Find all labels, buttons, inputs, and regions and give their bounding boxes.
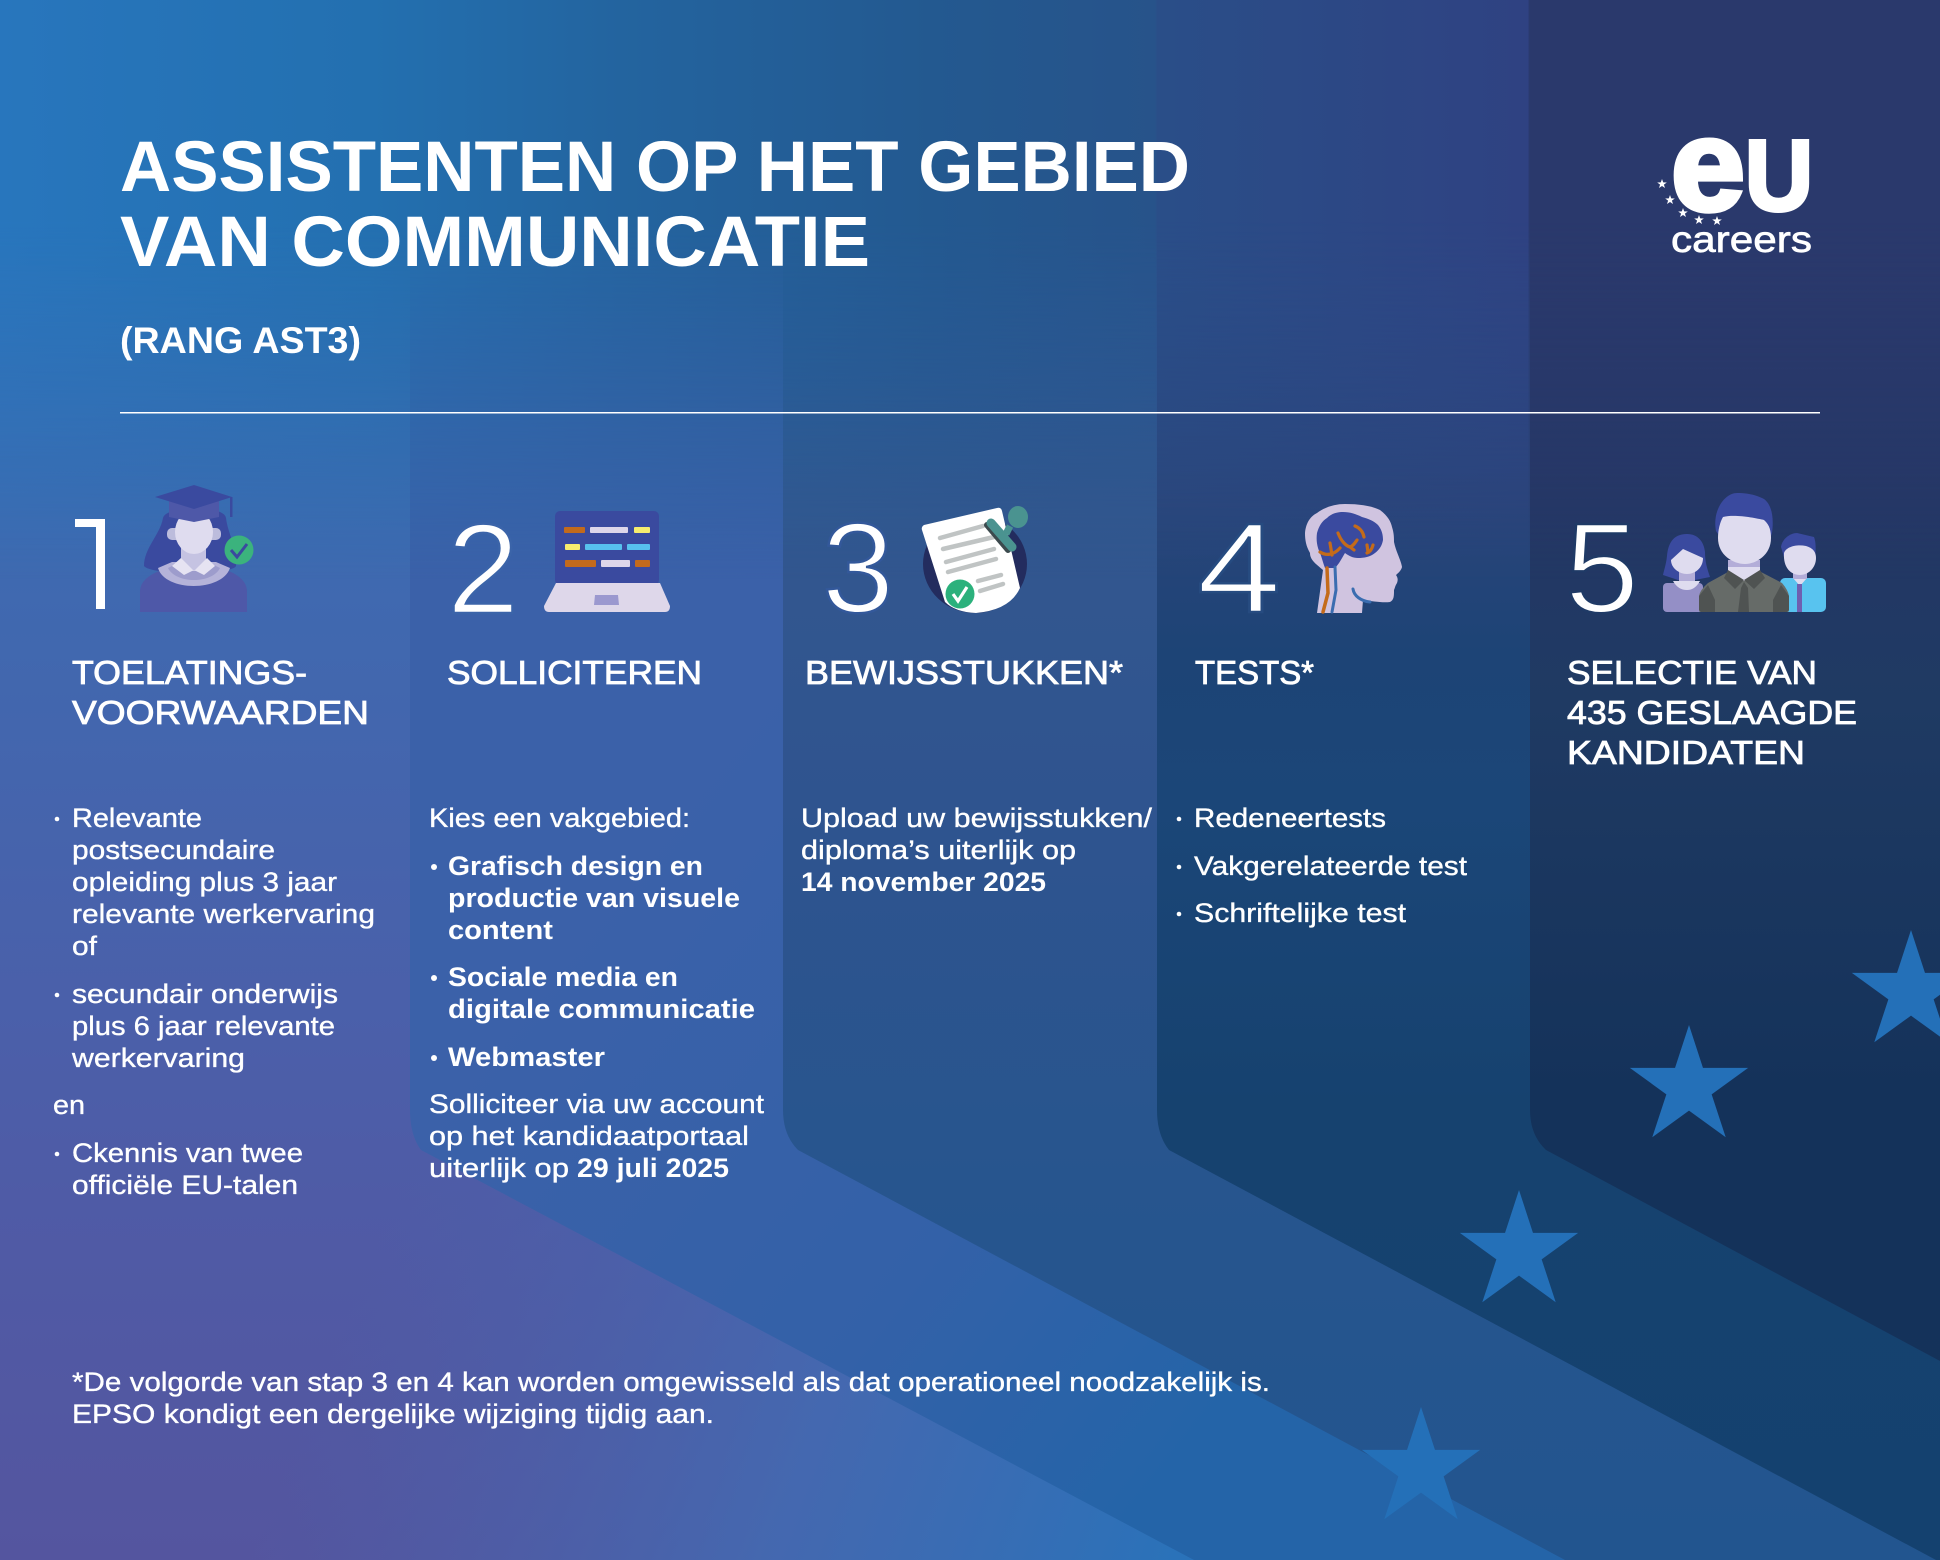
text: step 2 application: [429, 803, 765, 1183]
text: step 3 evidence: 14 november 2025: [801, 867, 1046, 897]
text: step 3 evidence: [801, 803, 1153, 897]
text: step 1 requirements: werkervaring: [71, 1043, 245, 1073]
heading: step 5: KANDIDATEN: [1567, 734, 1805, 771]
footnote: EPSO kondigt een dergelijke wijziging tijdig aan.: [72, 1399, 714, 1429]
number 5: 5: [1565, 497, 1639, 640]
text: step 2 application: op het kandidaatportaal: [429, 1121, 749, 1151]
icon: graduate: [140, 485, 254, 612]
stars decoration: [1362, 930, 1940, 1519]
heading: step 5: 435 GESLAAGDE: [1567, 694, 1857, 731]
heading: step 1: [72, 654, 369, 731]
text: step 1 requirements: secundair onderwijs: [72, 979, 338, 1009]
text: step 1 requirements: Relevante: [72, 803, 202, 833]
heading: step 2: SOLLICITEREN: [447, 654, 702, 691]
text: step 2 application: 29 juli 2025: [577, 1153, 729, 1183]
heading: step 3: BEWIJSSTUKKEN*: [805, 654, 1123, 691]
text: step 1 requirements: en: [53, 1090, 85, 1120]
heading: step 1: TOELATINGS-: [72, 654, 307, 691]
text: step 1 requirements: Ckennis van twee: [72, 1138, 303, 1168]
logo: eu careers: e: [1671, 92, 1745, 238]
text: step 1 requirements: of: [72, 931, 98, 961]
text: step 1 requirements: relevante werkervaring: [72, 899, 375, 929]
text: step 1 requirements: [53, 803, 375, 1200]
heading: step 5: [1567, 654, 1857, 771]
text: step 2 application: productie van visuele: [448, 883, 740, 913]
icon: laptop: [544, 511, 670, 612]
text: step 2 application: content: [448, 915, 553, 945]
icon: document: [922, 506, 1028, 613]
text: step 2 application: Grafisch design en: [448, 851, 703, 881]
footnote: [72, 1367, 1270, 1429]
text: step 1 requirements: officiële EU-talen: [72, 1170, 298, 1200]
text: step 1 requirements: opleiding plus 3 jaar: [72, 867, 337, 897]
text: step 3 evidence: Upload uw bewijsstukken/: [801, 803, 1153, 833]
icon: three people: [1663, 493, 1826, 612]
text: step 2 application: Sociale media en: [448, 962, 678, 992]
text: step 4 tests: Redeneertests: [1194, 803, 1386, 833]
number 4: 4: [1197, 497, 1281, 640]
text: step 2 application: uiterlijk op: [429, 1153, 569, 1183]
number 1: 1: [70, 494, 120, 637]
number 2: 2: [447, 498, 519, 641]
text: step 2 application: Solliciteer via uw account: [429, 1089, 765, 1119]
text: step 2 application: Webmaster: [448, 1042, 606, 1072]
text: step 4 tests: Vakgerelateerde test: [1194, 851, 1468, 881]
text: step 3 evidence: diploma’s uiterlijk op: [801, 835, 1076, 865]
heading: step 5: SELECTIE VAN: [1567, 654, 1817, 691]
text: step 4 tests: [1177, 803, 1468, 928]
number 1: [75, 519, 105, 609]
logo: eu careers: U: [1745, 120, 1813, 232]
footnote: *De volgorde van stap 3 en 4 kan worden omgewisseld als dat operationeel noodzakelijk is.: [72, 1367, 1270, 1397]
number 3: 3: [822, 497, 894, 640]
title: ASSISTENTEN OP HET GEBIED: [120, 128, 1190, 207]
subtitle: (RANG AST3): [120, 320, 361, 361]
text: step 4 tests: Schriftelijke test: [1194, 898, 1407, 928]
text: step 1 requirements: plus 6 jaar relevante: [72, 1011, 335, 1041]
logo: eu careers: careers: [1671, 219, 1812, 260]
title: VAN COMMUNICATIE: [120, 203, 870, 282]
icon: head with brain: [1305, 504, 1402, 613]
text: step 1 requirements: postsecundaire: [72, 835, 275, 865]
text: step 2 application: digitale communicatie: [448, 994, 755, 1024]
text: step 2 application: Kies een vakgebied:: [429, 803, 690, 833]
heading: step 4: TESTS*: [1195, 654, 1314, 691]
logo: eu careers: [1657, 92, 1813, 260]
heading: step 1: VOORWAARDEN: [72, 694, 369, 731]
title: [120, 128, 1190, 282]
